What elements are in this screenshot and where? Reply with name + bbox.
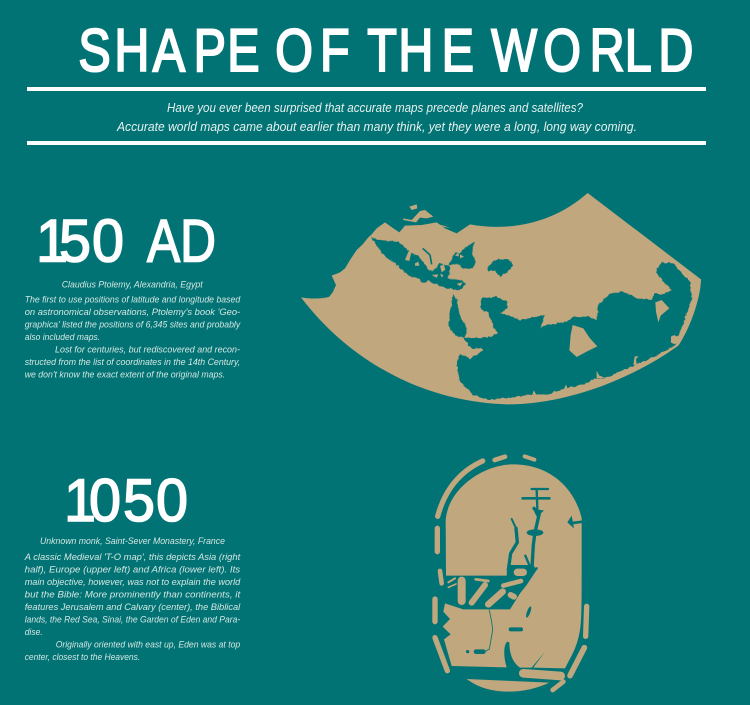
text block: T-O map: dise. [25,627,43,638]
rivers, crosses and inland marks [476,489,583,652]
inland teal shapes [533,508,574,528]
intro block with rules: Have you ever been surprised that accurate maps precede planes and satellites? [167,100,584,115]
title: SHAPE OF THE WORLD [78,16,693,84]
Red Sea [448,293,467,338]
text block: Ptolemy: structed from the list of coordinates in the 14th Century, [25,357,240,368]
text block: Ptolemy [25,280,241,380]
Mediterranean islands and Italy [405,248,464,286]
text block: T-O map [24,536,241,663]
map body [443,464,582,668]
heading: 150 AD [36,206,216,275]
text block: Ptolemy: The first to use positions of latitude and longitude based [25,294,241,306]
text block: Ptolemy: Lost for centuries, but rediscovered and recon- [55,344,240,356]
text block: T-O map: but the Bible: More prominently than continents, it [25,590,241,600]
text block: Ptolemy: on astronomical observations, Ptolemy's book 'Geo- [25,307,240,318]
text block: T-O map: Originally oriented with east up, Eden was at top [56,640,241,650]
northern islands [403,204,450,228]
text block: Ptolemy: we don't know the exact extent of the original maps. [25,370,225,380]
border fragments and sea bars [435,456,587,690]
map: Ptolemy world map [301,193,701,404]
intro block with rules [27,87,706,145]
Taprobane and peninsula [532,300,677,395]
text block: Ptolemy: also included maps. [25,332,100,343]
heading: 150 AD: 150 [36,206,124,275]
text block: T-O map: features Jerusalem and Calvary (center), the Biblical [25,602,241,613]
text block: T-O map: A classic Medieval 'T-O map', this depicts Asia (right [24,552,241,563]
map: Saint-Sever T-O map [435,456,587,692]
Persian Gulf [480,297,507,330]
heading: 150 AD: AD [147,206,216,274]
intro block with rules: Accurate world maps came about earlier than many think, yet they were a long, long way coming. [116,119,637,134]
text block: Ptolemy: graphica' listed the positions of 6,345 sites and probably [25,320,241,330]
map land [301,193,701,404]
text block: T-O map: half), Europe (upper left) and Africa (lower left). Its [25,564,240,576]
text block: Ptolemy: Claudius Ptolemy, Alexandria, Egypt [62,280,203,290]
heading: 1050: 1050 [64,466,188,535]
text block: T-O map: Unknown monk, Saint-Sever Monastery, France [40,536,225,547]
bottom crescent [467,679,549,692]
seas [371,237,692,400]
Indian Ocean [457,262,692,400]
text block: T-O map: main objective, however, was not to explain the world [25,577,241,588]
text block: T-O map: center, closest to the Heavens. [25,652,140,663]
Mediterranean and Black Sea [371,237,476,290]
Caspian sea [487,259,514,277]
text block: T-O map: lands, the Red Sea, Sinai, the Garden of Eden and Para- [25,614,240,626]
